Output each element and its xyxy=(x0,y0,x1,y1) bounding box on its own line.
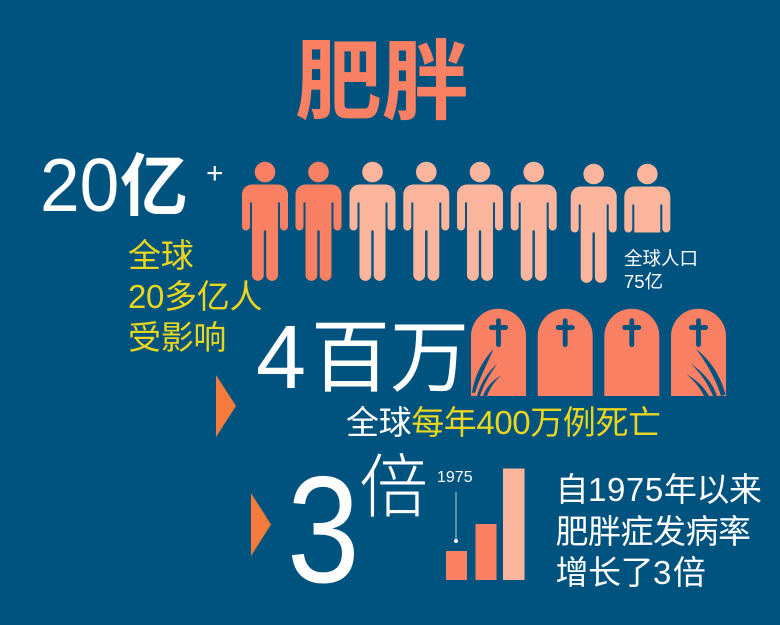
text: world population: 全球人口 xyxy=(624,248,698,269)
icon: person 5 xyxy=(457,162,503,281)
icon: partial person 8 xyxy=(624,164,670,232)
tombstones xyxy=(471,309,726,396)
icon: tombstone 3 xyxy=(604,309,659,396)
stat: 4 million unit: 百万 xyxy=(311,312,469,402)
plus sign: + xyxy=(206,157,224,190)
title: 肥胖 xyxy=(295,34,469,131)
bar: 1975 xyxy=(446,551,467,580)
text: growth since 1975: 自1975年以来 xyxy=(556,471,761,508)
character: times: 倍 xyxy=(359,449,428,526)
stat: 3 times xyxy=(287,445,428,615)
stat: 4 million number: 4 xyxy=(256,308,306,408)
text: global 2 billion affected xyxy=(128,236,262,356)
number 3: 3 xyxy=(287,445,360,615)
label: 1975: 1975 xyxy=(437,469,473,486)
bar: middle xyxy=(476,524,496,580)
icon: person 1 xyxy=(242,162,288,281)
icon: tombstone 4 with grass xyxy=(671,309,726,396)
icon: person 2 xyxy=(296,162,342,281)
text: world population xyxy=(624,248,698,292)
arrow: marker for tripling xyxy=(251,493,271,556)
stat: 2 billion unit: 亿 xyxy=(120,149,188,225)
text: global 2 billion affected: 全球 xyxy=(128,236,193,274)
icon: person 4 xyxy=(403,162,449,281)
icon: person 7 xyxy=(571,164,617,283)
text: world population: 75亿 xyxy=(624,271,663,292)
pointer: 1975 marker xyxy=(454,492,458,543)
icon: person 6 xyxy=(511,162,557,281)
stat: 2 billion number: 20 xyxy=(40,143,119,227)
icon: tombstone 1 with grass xyxy=(471,309,526,396)
text: global 2 billion affected: 20多亿人 xyxy=(128,278,262,314)
text: growth since 1975: 增长了3倍 xyxy=(556,554,705,591)
icon: tombstone 2 xyxy=(538,309,593,396)
icon: person 3 xyxy=(350,162,396,281)
text: growth since 1975: 肥胖症发病率 xyxy=(556,512,750,550)
text: growth since 1975 xyxy=(556,471,761,591)
people pictogram xyxy=(242,162,670,283)
text: global 2 billion affected: 受影响 xyxy=(128,318,226,356)
bar chart: obesity growth xyxy=(446,468,524,580)
text: annual deaths: 全球每年400万例死亡 xyxy=(346,404,661,441)
bar: latest xyxy=(503,468,524,580)
arrow: marker for deaths xyxy=(216,375,236,437)
